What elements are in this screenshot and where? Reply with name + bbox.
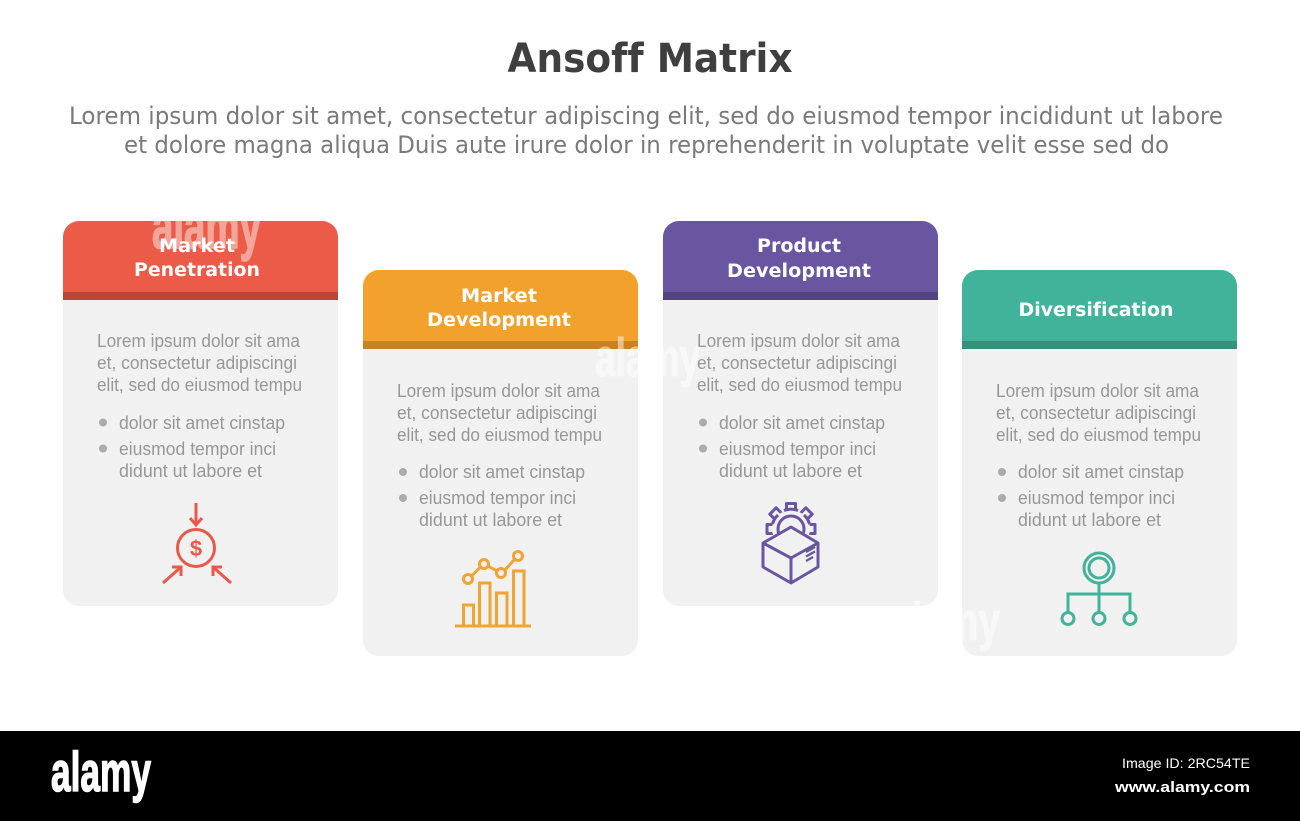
bullet list: dolor sit amet cinstap (119, 413, 285, 433)
card body (63, 292, 338, 606)
description: Lorem ipsum dolor sit ama (97, 331, 301, 351)
panel: diversification (962, 270, 1237, 656)
bullet list: dolor sit amet cinstap (1018, 462, 1184, 482)
image id: Image ID: 2RC54TE (1122, 755, 1250, 771)
subtitle text: Lorem ipsum dolor sit amet, consectetur adipiscing elit, sed do eiusmod tempor incididunt ut labore (69, 102, 1223, 130)
panel: product development (663, 221, 938, 606)
icon: box with gear (763, 504, 818, 583)
footer logo: alamy (51, 740, 151, 803)
heading: Development (427, 310, 571, 331)
heading (427, 286, 571, 331)
description (697, 331, 902, 395)
website: www.alamy.com (1114, 779, 1250, 796)
description: elit, sed do eiusmod tempu (397, 425, 602, 445)
card body (962, 341, 1237, 656)
description: Lorem ipsum dolor sit ama (697, 331, 901, 351)
icon: dollar with inward arrows: $ (190, 536, 202, 561)
icon: hierarchy network (1062, 553, 1136, 624)
icon: bar chart with trend line (455, 552, 531, 626)
description (97, 331, 302, 395)
description (996, 381, 1201, 445)
panel: market development (363, 270, 638, 656)
bullet list: dolor sit amet cinstap (419, 462, 585, 482)
bullet list: didunt ut labore et (719, 461, 862, 481)
subtitle text (69, 102, 1223, 159)
heading (134, 236, 260, 281)
heading: Penetration (134, 260, 260, 281)
header watermark: alamy (152, 193, 261, 262)
title: Ansoff Matrix (508, 36, 793, 82)
card header (663, 221, 938, 300)
description: elit, sed do eiusmod tempu (97, 375, 302, 395)
bullet list (399, 462, 585, 530)
description: et, consectetur adipiscingi (397, 403, 597, 423)
card header (962, 270, 1237, 349)
bullet list: eiusmod tempor inci (719, 439, 876, 459)
bullet list (998, 462, 1184, 530)
bullet list: didunt ut labore et (1018, 510, 1161, 530)
bullet list: eiusmod tempor inci (119, 439, 276, 459)
description: elit, sed do eiusmod tempu (697, 375, 902, 395)
heading: Development (727, 261, 871, 282)
panel: market penetration (63, 193, 338, 606)
heading: Market (159, 236, 235, 257)
heading: Market (461, 286, 537, 307)
heading (727, 236, 871, 282)
description: et, consectetur adipiscingi (996, 403, 1196, 423)
description (397, 381, 602, 445)
description: Lorem ipsum dolor sit ama (996, 381, 1200, 401)
bullet list (99, 413, 285, 481)
bullet list: didunt ut labore et (119, 461, 262, 481)
description: elit, sed do eiusmod tempu (996, 425, 1201, 445)
bullet list (699, 413, 885, 481)
description: et, consectetur adipiscingi (697, 353, 897, 373)
subtitle text: et dolore magna aliqua Duis aute irure dolor in reprehenderit in voluptate velit esse sed do (124, 131, 1169, 159)
bullet list: eiusmod tempor inci (1018, 488, 1175, 508)
card body (663, 292, 938, 606)
card body (363, 341, 638, 656)
card header (363, 270, 638, 349)
heading: Diversification (1018, 300, 1174, 321)
footer bar (0, 731, 1300, 821)
icon: dollar with inward arrows (163, 503, 231, 583)
bullet list: eiusmod tempor inci (419, 488, 576, 508)
description: et, consectetur adipiscingi (97, 353, 297, 373)
description: Lorem ipsum dolor sit ama (397, 381, 601, 401)
bullet list: dolor sit amet cinstap (719, 413, 885, 433)
watermark: centre: alamy (595, 328, 700, 388)
bullet list: didunt ut labore et (419, 510, 562, 530)
heading: Product (757, 236, 841, 257)
watermark: lower right: alamy (890, 592, 1000, 652)
card header (63, 221, 338, 300)
